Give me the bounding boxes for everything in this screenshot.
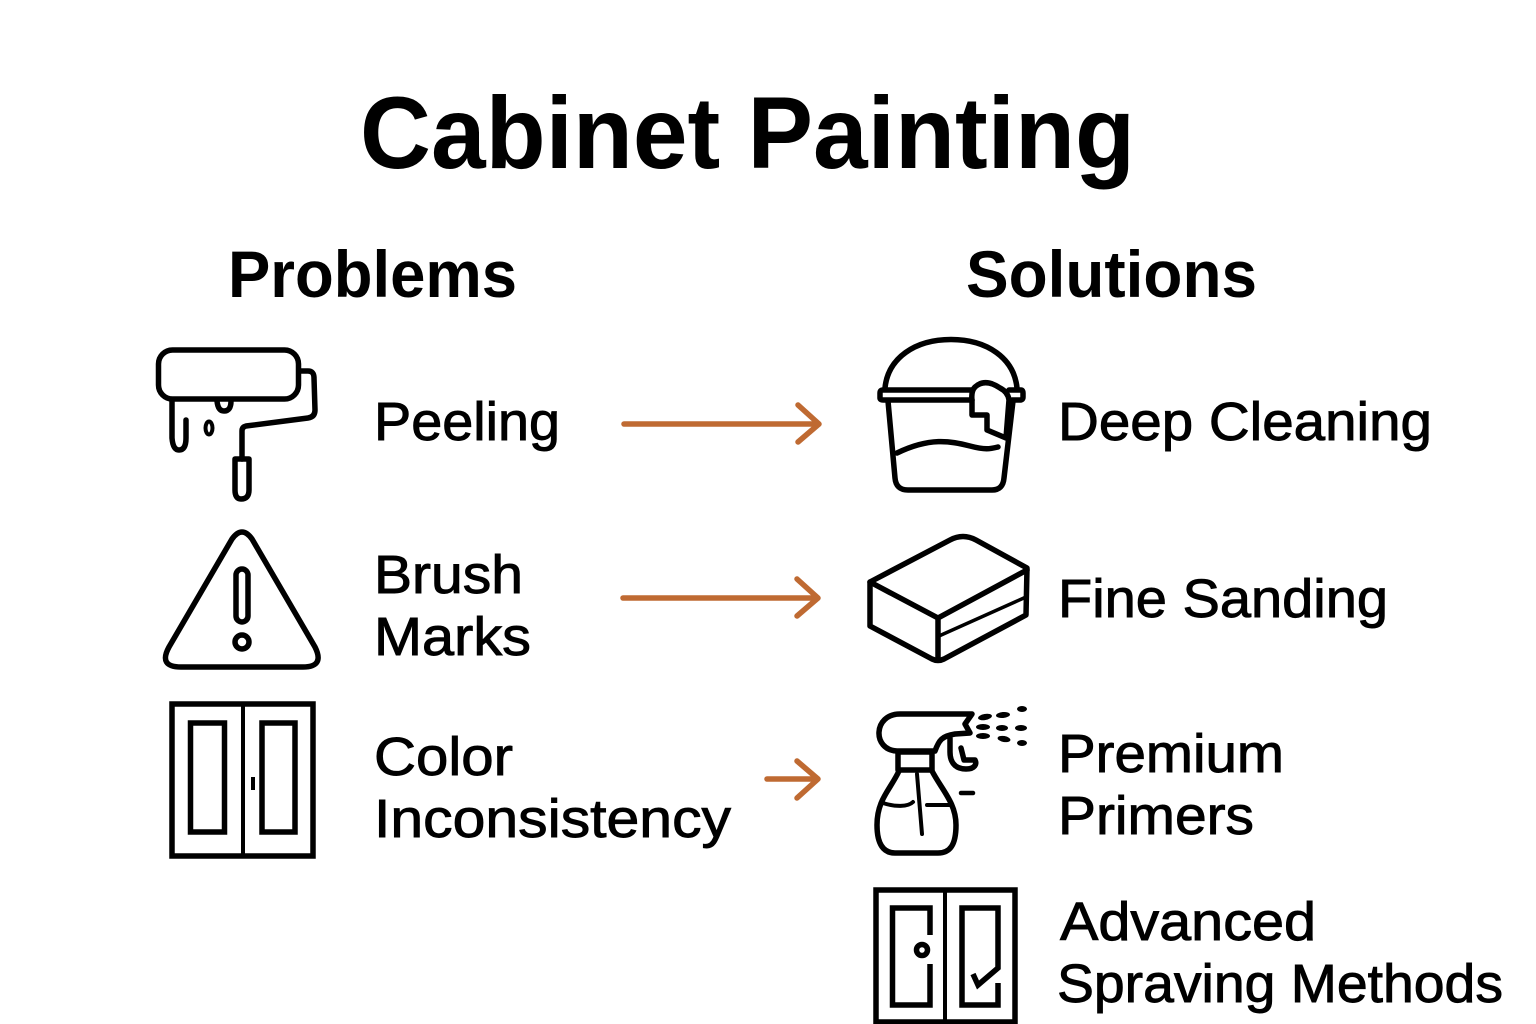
label: brush marks: Marks bbox=[374, 607, 531, 667]
arrow: color inconsistency to premium primers bbox=[767, 761, 818, 798]
icon: sanding block bbox=[870, 536, 1027, 660]
label: advanced spraving methods: Advanced bbox=[1060, 892, 1316, 952]
label: advanced spraving methods: Spraving Methods bbox=[1057, 954, 1503, 1014]
heading: solutions: Solutions bbox=[966, 237, 1257, 311]
label: premium primers: Primers bbox=[1058, 786, 1254, 846]
icon: bucket bbox=[880, 340, 1023, 490]
label: brush marks bbox=[374, 545, 531, 667]
label: deep cleaning: Deep Cleaning bbox=[1058, 392, 1432, 452]
heading: problems: Problems bbox=[228, 237, 517, 311]
label: color inconsistency: Color bbox=[374, 727, 513, 787]
label: premium primers bbox=[1058, 724, 1284, 846]
icon: door with checkmark bbox=[876, 890, 1015, 1022]
label: color inconsistency bbox=[374, 727, 731, 849]
icon: paint roller bbox=[158, 350, 315, 499]
arrow: brush marks to fine sanding bbox=[623, 579, 818, 616]
label: advanced spraving methods bbox=[1057, 892, 1503, 1014]
icon: warning triangle bbox=[165, 532, 318, 667]
title: Cabinet Painting bbox=[360, 76, 1135, 190]
icon: cabinet doors bbox=[172, 704, 313, 856]
label: brush marks: Brush bbox=[374, 545, 523, 605]
arrow: peeling to deep cleaning bbox=[624, 405, 819, 442]
icon: spray bottle bbox=[877, 706, 1027, 853]
label: fine sanding: Fine Sanding bbox=[1058, 569, 1388, 629]
label: color inconsistency: Inconsistency bbox=[374, 789, 731, 849]
label: peeling: Peeling bbox=[374, 392, 560, 452]
label: premium primers: Premium bbox=[1058, 724, 1284, 784]
